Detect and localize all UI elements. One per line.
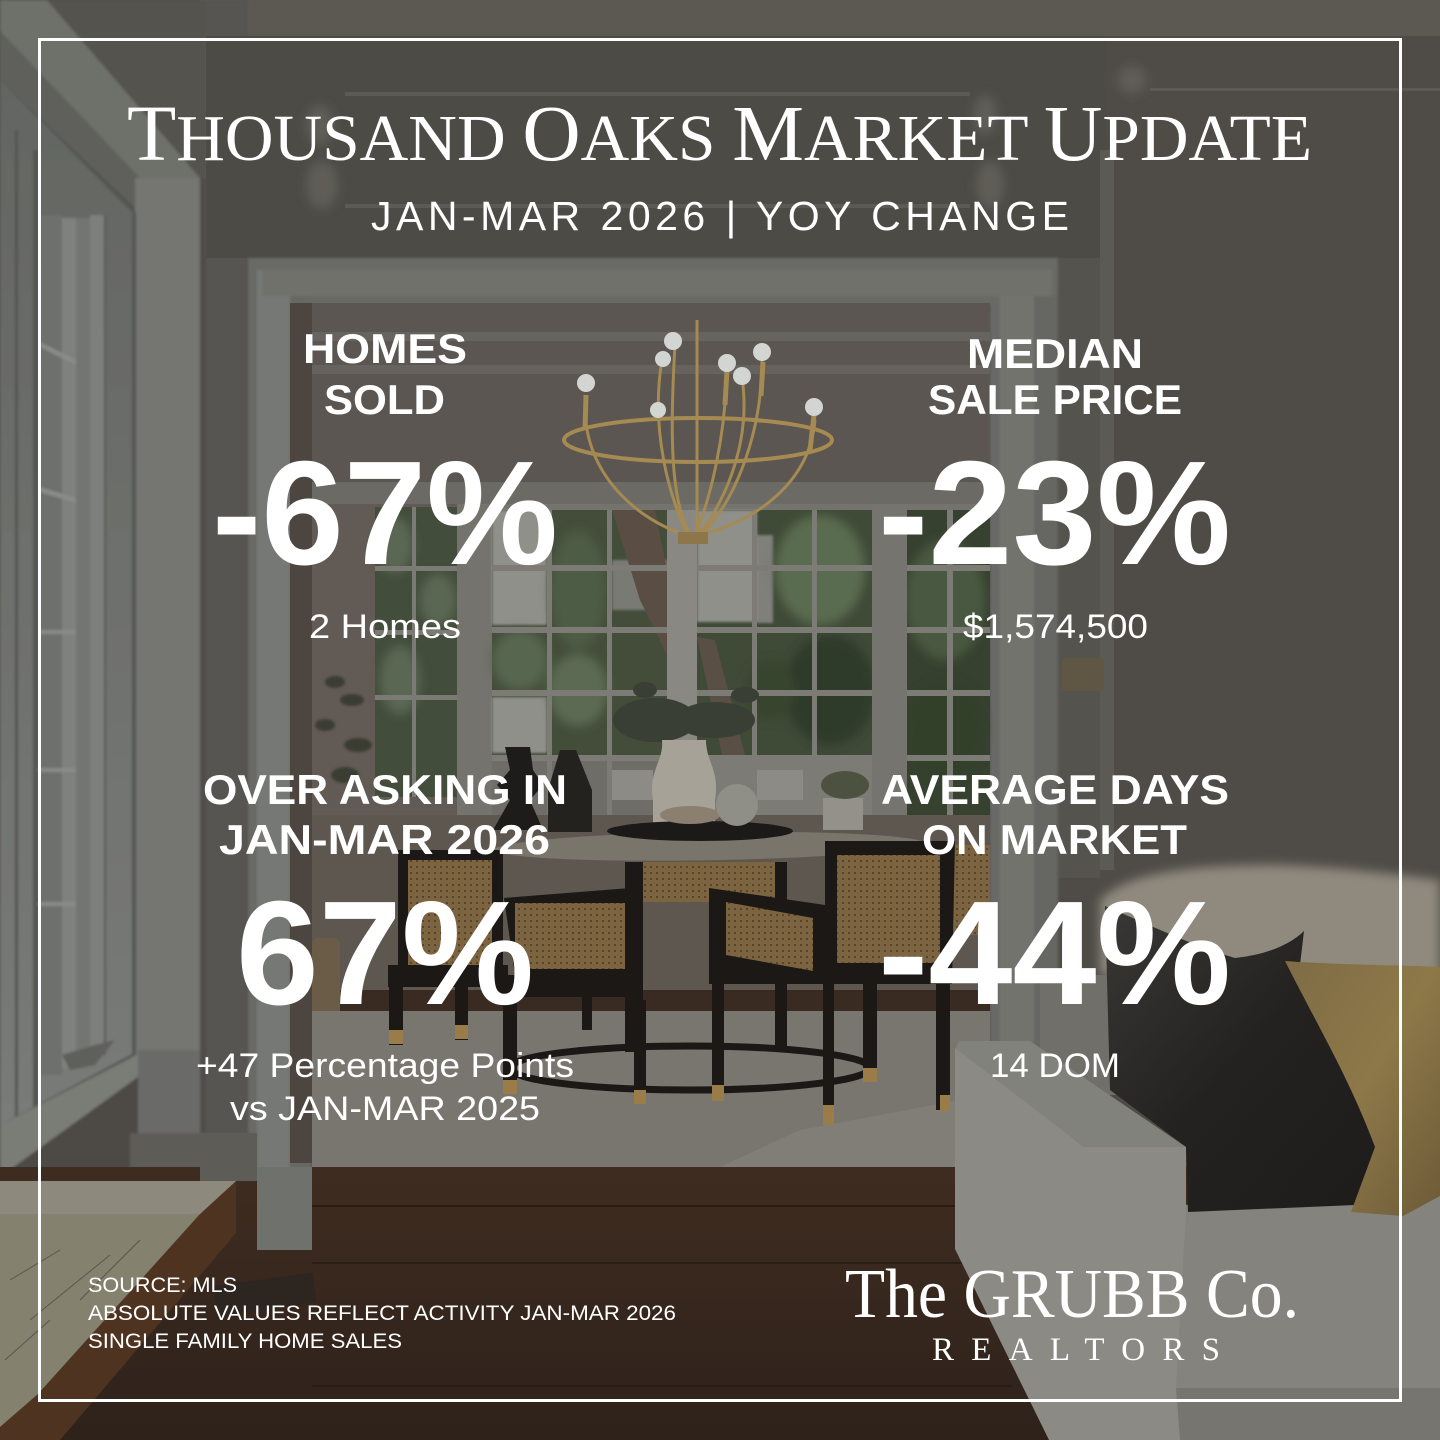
subtitle: JAN-MAR 2026 | YOY CHANGE — [371, 193, 1069, 239]
far-left window — [375, 507, 457, 797]
sofa — [955, 865, 1440, 1440]
source notes: SOURCE: MLS — [88, 1274, 237, 1297]
window latch — [62, 1040, 115, 1070]
vase — [652, 740, 716, 823]
far chair backs — [640, 862, 780, 902]
detail: vs JAN-MAR 2025 — [230, 1090, 540, 1128]
detail: +47 Percentage Points — [196, 1047, 574, 1085]
seat — [1120, 1190, 1440, 1440]
value: -67% — [212, 431, 558, 596]
side plant pot — [821, 771, 869, 830]
patio furniture band — [492, 760, 667, 820]
heading — [928, 330, 1182, 423]
logo: The GRUBB Co. Realtors: The GRUBB Co. — [845, 1256, 1299, 1333]
stat: median sale price — [878, 330, 1231, 646]
wall strip right of door — [1058, 258, 1100, 878]
sofa arm front — [955, 1048, 1186, 1440]
wall rosettes — [306, 66, 1146, 209]
leaf masses — [492, 515, 985, 780]
heading: ON MARKET — [922, 816, 1187, 863]
left corner wall and window reveal — [0, 0, 257, 1181]
heading — [881, 766, 1229, 863]
floor — [0, 1167, 1440, 1440]
source notes: SINGLE FAMILY HOME SALES — [88, 1330, 402, 1353]
value: 67% — [236, 871, 534, 1036]
dark vases — [493, 747, 543, 830]
header wall panel — [206, 36, 1106, 258]
window sash — [0, 80, 132, 1125]
black pillow — [1105, 906, 1378, 1212]
value: -23% — [878, 431, 1231, 596]
value: -44% — [878, 871, 1231, 1036]
window panes: foliage — [492, 510, 990, 820]
door clock detail — [1062, 658, 1104, 691]
tree trunk — [612, 510, 667, 655]
detail: $1,574,500 — [963, 608, 1148, 646]
room ceiling — [290, 303, 990, 510]
heading: HOMES — [303, 325, 467, 372]
left potted plant — [315, 676, 372, 783]
window sill — [0, 1054, 138, 1177]
source notes — [88, 1274, 676, 1353]
door column base — [257, 1167, 312, 1250]
fur throw — [1100, 865, 1440, 985]
wall moulding — [345, 88, 1440, 870]
wicker basket — [312, 938, 340, 1026]
lower wall behind table — [312, 815, 990, 995]
rug — [312, 1011, 990, 1167]
sky patches — [492, 510, 773, 753]
sofa arm top — [955, 1041, 1186, 1147]
window pillar — [667, 510, 697, 830]
room back wall — [312, 504, 990, 834]
gold pillow — [1285, 961, 1440, 1216]
heading: MEDIAN — [967, 330, 1143, 377]
reveal panel — [135, 178, 200, 1058]
window glazing bars — [38, 342, 76, 906]
left foreground bench — [0, 1181, 236, 1440]
stat: over asking — [196, 766, 574, 1128]
heading: JAN-MAR 2026 — [219, 816, 550, 863]
chandelier bulbs — [577, 332, 823, 418]
stat: homes sold — [212, 325, 558, 646]
heading — [303, 325, 467, 423]
logo: The GRUBB Co. Realtors — [845, 1256, 1299, 1368]
dining table and decor — [388, 682, 990, 1125]
heading: OVER ASKING IN — [203, 766, 567, 813]
heading: SOLD — [324, 376, 445, 423]
detail: 2 Homes — [309, 608, 461, 646]
source notes: ABSOLUTE VALUES REFLECT ACTIVITY JAN-MAR 2026 — [88, 1302, 676, 1325]
logo: The GRUBB Co. Realtors: REALTORS — [932, 1332, 1220, 1368]
detail: 14 DOM — [990, 1047, 1120, 1085]
left chair — [388, 850, 646, 1104]
table base — [625, 862, 643, 1052]
tray — [607, 821, 793, 841]
chandelier — [564, 320, 832, 544]
heading — [203, 766, 567, 863]
wall below window — [138, 1050, 200, 1140]
stat: average days on market — [878, 766, 1231, 1085]
title: THOUSAND OAKS MARKET UPDATE — [127, 91, 1312, 178]
ceiling dentil band — [200, 0, 1440, 36]
heading: SALE PRICE — [928, 376, 1182, 423]
room window wall — [457, 504, 990, 830]
glass orb — [716, 784, 758, 826]
plant — [613, 682, 759, 742]
sofa back — [1040, 975, 1150, 1095]
window muntins — [492, 510, 990, 820]
heading: AVERAGE DAYS — [881, 766, 1229, 813]
table top — [491, 832, 925, 861]
detail — [196, 1047, 574, 1128]
tray objects — [660, 806, 720, 824]
right chair — [709, 841, 955, 1125]
door frame trim — [248, 258, 1058, 1250]
